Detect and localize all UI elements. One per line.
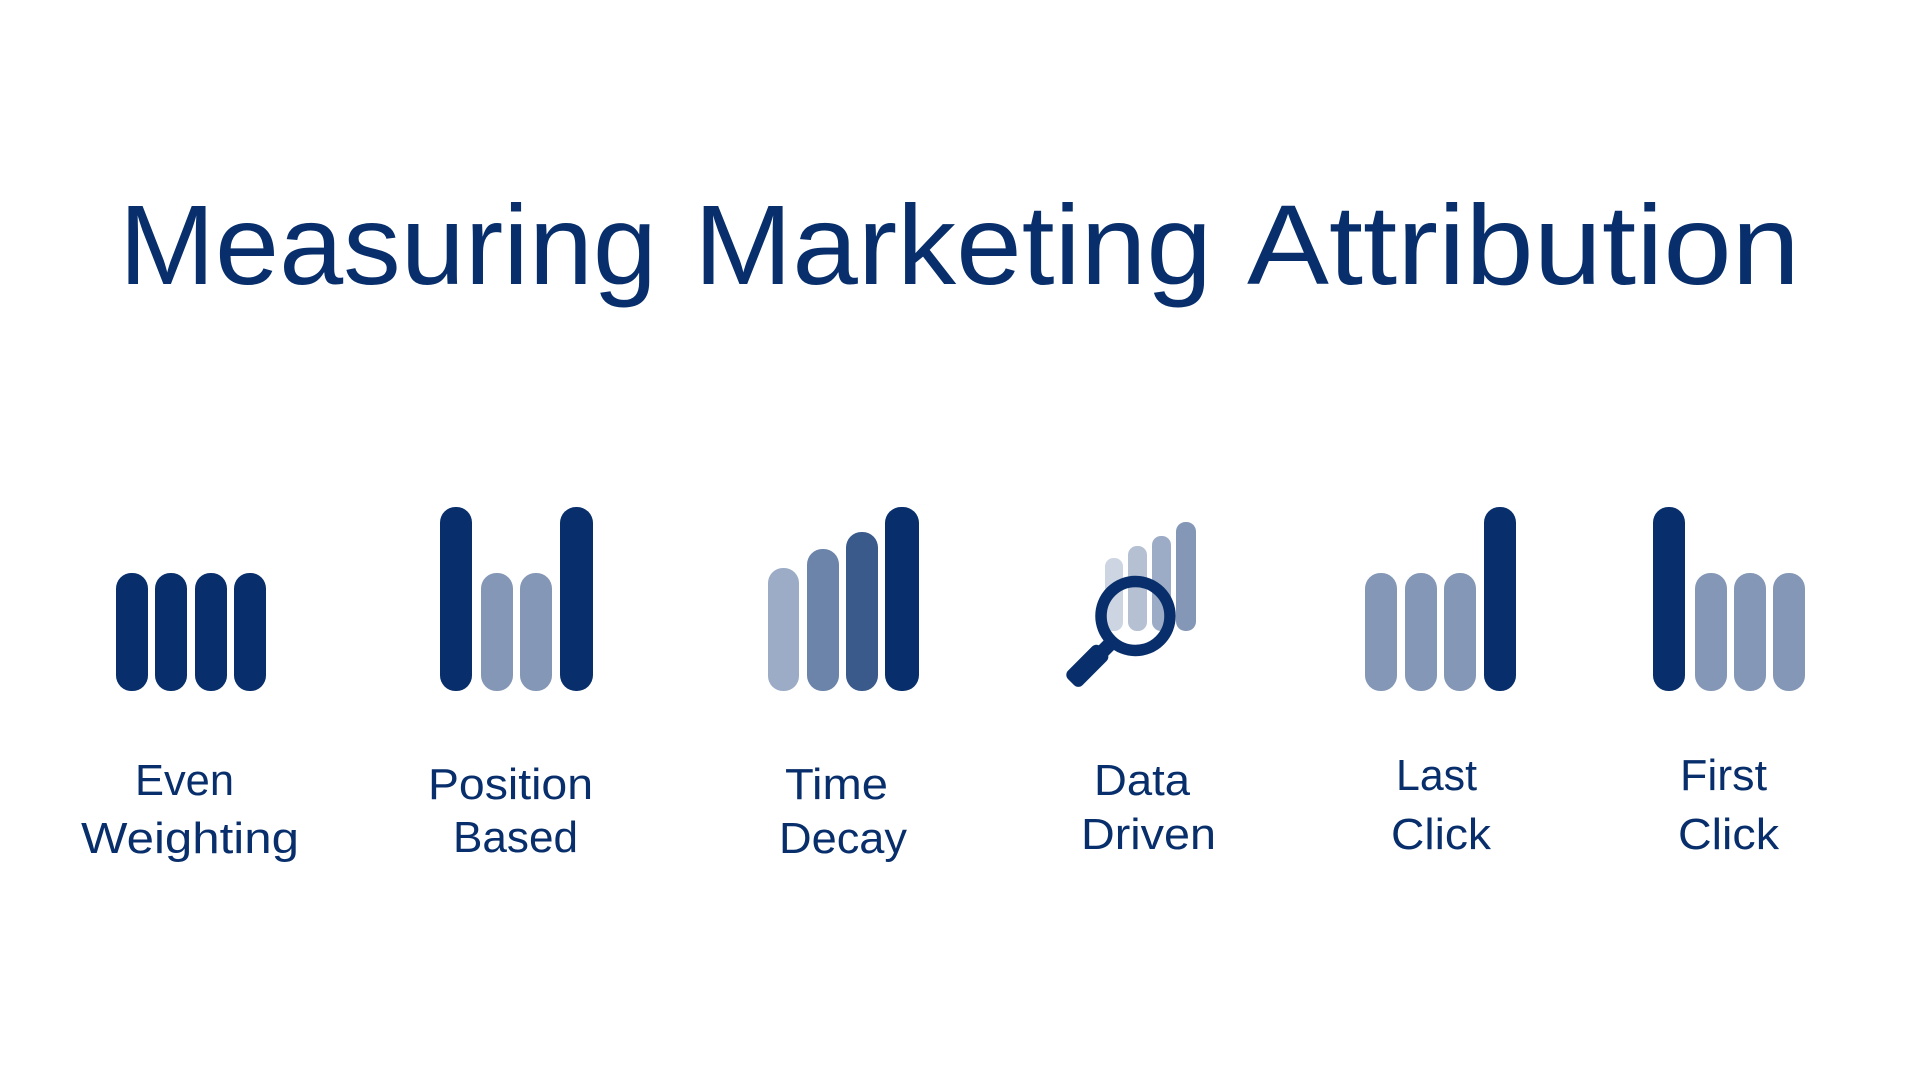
label: last click	[1391, 751, 1492, 859]
title: Attribution	[1247, 182, 1800, 308]
bar chart: data driven	[1105, 522, 1196, 631]
label: time decay	[779, 760, 907, 863]
label: last click: Click	[1391, 810, 1492, 859]
label: data driven: Data	[1094, 756, 1191, 805]
label: position based: Position	[428, 760, 593, 809]
title	[119, 182, 1800, 308]
panel: first click	[1653, 507, 1805, 859]
panel: data driven	[1064, 522, 1216, 859]
bar chart: even weighting	[116, 573, 266, 691]
bar chart: time decay	[768, 507, 919, 691]
label: time decay: Decay	[779, 814, 907, 863]
panel: position based	[428, 507, 593, 862]
panel: time decay	[768, 507, 919, 863]
label: time decay: Time	[785, 760, 888, 809]
bar chart: position based	[440, 507, 593, 691]
bar chart: first click	[1653, 507, 1805, 691]
label: position based	[428, 760, 593, 862]
bar chart: last click	[1365, 507, 1516, 691]
title: Marketing	[694, 182, 1212, 308]
label: even weighting: Weighting	[81, 814, 299, 863]
panel: even weighting	[81, 573, 299, 863]
label: first click	[1678, 751, 1780, 859]
label: data driven: Driven	[1081, 810, 1216, 859]
label: even weighting	[81, 756, 299, 863]
label: even weighting: Even	[135, 756, 234, 805]
label: first click: Click	[1678, 810, 1780, 859]
icon: magnifying glass	[1064, 582, 1170, 689]
panel: last click	[1365, 507, 1516, 859]
label: last click: Last	[1396, 751, 1477, 800]
title: Measuring	[119, 182, 657, 308]
label: data driven	[1081, 756, 1216, 859]
label: position based: Based	[453, 813, 578, 862]
label: first click: First	[1680, 751, 1767, 800]
